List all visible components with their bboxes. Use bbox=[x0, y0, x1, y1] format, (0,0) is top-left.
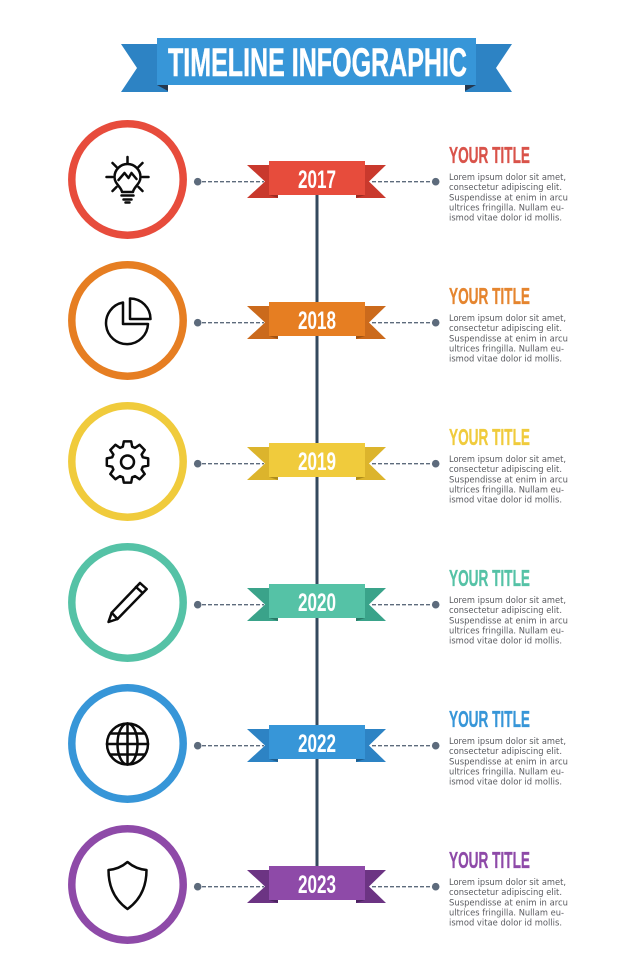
ribbon 2017: 2017 bbox=[298, 166, 336, 194]
connector right bbox=[372, 883, 440, 890]
text block bbox=[449, 283, 568, 364]
text block: ismod vitae dolor id mollis. bbox=[449, 354, 562, 364]
text block: consectetur adipiscing elit. bbox=[449, 324, 562, 334]
text block bbox=[449, 424, 568, 506]
connector left bbox=[194, 460, 264, 468]
ribbon 2022 bbox=[247, 725, 386, 762]
text block: ultrices fringilla. Nullam eu- bbox=[449, 204, 564, 214]
text block: consectetur adipiscing elit. bbox=[449, 606, 562, 616]
text block bbox=[449, 565, 568, 646]
text block: YOUR TITLE bbox=[449, 565, 530, 591]
ribbon 2020 bbox=[247, 584, 386, 621]
icon circle: shield bbox=[72, 829, 183, 940]
ribbon 2022: 2022 bbox=[298, 730, 336, 758]
icon circle: pencil bbox=[72, 547, 183, 658]
text block: ultrices fringilla. Nullam eu- bbox=[449, 908, 564, 918]
icon circle: globe bbox=[72, 688, 183, 799]
connector left bbox=[194, 742, 264, 750]
text block: consectetur adipiscing elit. bbox=[449, 183, 562, 193]
text block: YOUR TITLE bbox=[449, 424, 530, 450]
text block: Suspendisse at enim in arcu bbox=[449, 475, 568, 485]
ribbon 2017 bbox=[247, 161, 386, 198]
text block: Lorem ipsum dolor sit amet, bbox=[449, 314, 566, 324]
text block: YOUR TITLE bbox=[449, 847, 530, 873]
text block: ultrices fringilla. Nullam eu- bbox=[449, 486, 564, 496]
text block: YOUR TITLE bbox=[449, 706, 530, 732]
text block: Lorem ipsum dolor sit amet, bbox=[449, 455, 566, 465]
connector right bbox=[372, 742, 440, 750]
row 2017 bbox=[72, 124, 568, 235]
row 2023 bbox=[72, 829, 568, 940]
text block bbox=[449, 142, 568, 224]
ribbon 2023 bbox=[247, 866, 386, 903]
text block: ismod vitae dolor id mollis. bbox=[449, 496, 562, 506]
icon circle: gear bbox=[72, 406, 183, 517]
icon circle: light bulb bbox=[72, 124, 183, 235]
ribbon 2019: 2019 bbox=[298, 448, 336, 476]
text block bbox=[449, 847, 568, 928]
text block: Lorem ipsum dolor sit amet, bbox=[449, 878, 566, 888]
text block: Suspendisse at enim in arcu bbox=[449, 334, 568, 344]
row 2018 bbox=[72, 265, 568, 376]
text block: ismod vitae dolor id mollis. bbox=[449, 636, 562, 646]
text block: consectetur adipiscing elit. bbox=[449, 747, 562, 757]
text block: Suspendisse at enim in arcu bbox=[449, 898, 568, 908]
connector left bbox=[194, 883, 264, 890]
text block: ismod vitae dolor id mollis. bbox=[449, 778, 562, 788]
text block: Lorem ipsum dolor sit amet, bbox=[449, 173, 566, 183]
text block: consectetur adipiscing elit. bbox=[449, 465, 562, 475]
text block: consectetur adipiscing elit. bbox=[449, 888, 562, 898]
ribbon 2019 bbox=[247, 443, 386, 480]
text block bbox=[449, 706, 568, 788]
text block: Lorem ipsum dolor sit amet, bbox=[449, 737, 566, 747]
title: TIMELINE INFOGRAPHIC bbox=[168, 41, 467, 85]
text block: Suspendisse at enim in arcu bbox=[449, 616, 568, 626]
row 2022 bbox=[72, 688, 568, 799]
ribbon 2020: 2020 bbox=[298, 589, 336, 617]
text block: ismod vitae dolor id mollis. bbox=[449, 918, 562, 928]
text block: ultrices fringilla. Nullam eu- bbox=[449, 626, 564, 636]
timeline spine bbox=[316, 190, 318, 870]
text block: YOUR TITLE bbox=[449, 283, 530, 309]
connector left bbox=[194, 319, 264, 326]
text block: ismod vitae dolor id mollis. bbox=[449, 214, 562, 224]
ribbon 2023: 2023 bbox=[298, 871, 336, 899]
ribbon 2018 bbox=[247, 302, 386, 339]
text block: ultrices fringilla. Nullam eu- bbox=[449, 344, 564, 354]
icon circle: pie chart bbox=[72, 265, 183, 376]
text block: ultrices fringilla. Nullam eu- bbox=[449, 768, 564, 778]
ribbon 2018: 2018 bbox=[298, 307, 336, 335]
connector right bbox=[372, 319, 440, 326]
row 2019 bbox=[72, 406, 568, 517]
connector left bbox=[194, 601, 264, 608]
connector right bbox=[372, 601, 440, 608]
text block: Lorem ipsum dolor sit amet, bbox=[449, 596, 566, 606]
text block: Suspendisse at enim in arcu bbox=[449, 757, 568, 767]
connector right bbox=[372, 178, 440, 186]
row 2020 bbox=[72, 547, 568, 658]
text block: YOUR TITLE bbox=[449, 142, 530, 168]
connector left bbox=[194, 178, 264, 186]
title banner bbox=[121, 38, 512, 92]
connector right bbox=[372, 460, 440, 468]
text block: Suspendisse at enim in arcu bbox=[449, 193, 568, 203]
